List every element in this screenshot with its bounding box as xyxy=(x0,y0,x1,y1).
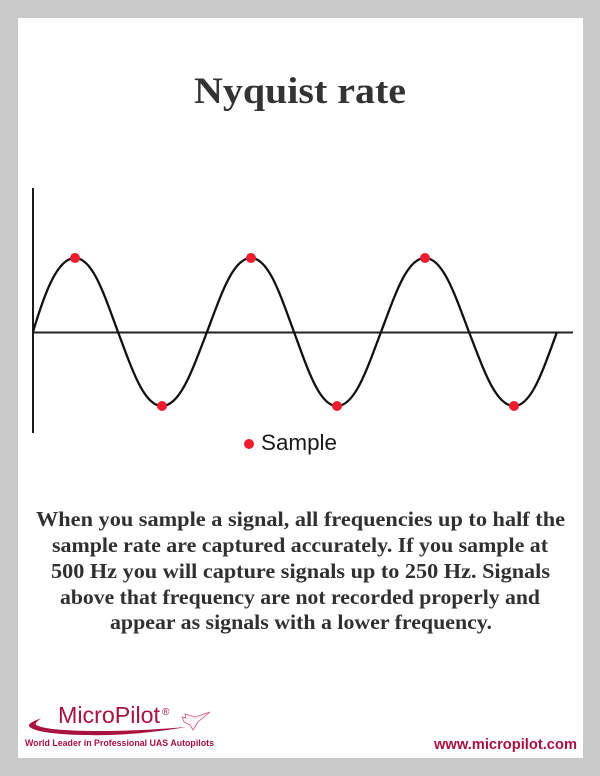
logo tagline: World Leader in Professional UAS Autopilots xyxy=(25,738,214,748)
description text: When you sample a signal, all frequencies up to half the xyxy=(36,507,565,531)
registered mark: ® xyxy=(162,707,170,718)
chart: sampled sine wave xyxy=(32,188,573,433)
logo wordmark: MicroPilot xyxy=(58,702,161,728)
description text: sample rate are captured accurately. If you sample at xyxy=(52,533,548,557)
legend: sample: Sample xyxy=(261,430,337,455)
icon: airplane xyxy=(182,712,210,730)
description text: above that frequency are not recorded properly and xyxy=(60,585,540,609)
description text xyxy=(36,507,565,634)
x axis xyxy=(32,332,573,334)
description text: appear as signals with a lower frequency. xyxy=(110,610,492,634)
y axis xyxy=(32,188,34,433)
logo swoosh xyxy=(29,718,186,735)
logo: MicroPilot xyxy=(25,702,214,748)
sine wave xyxy=(33,258,557,406)
title: Nyquist rate xyxy=(194,71,406,112)
sample points xyxy=(70,253,519,411)
website url: www.micropilot.com xyxy=(433,737,577,753)
description text: 500 Hz you will capture signals up to 250 Hz. Signals xyxy=(51,559,550,583)
